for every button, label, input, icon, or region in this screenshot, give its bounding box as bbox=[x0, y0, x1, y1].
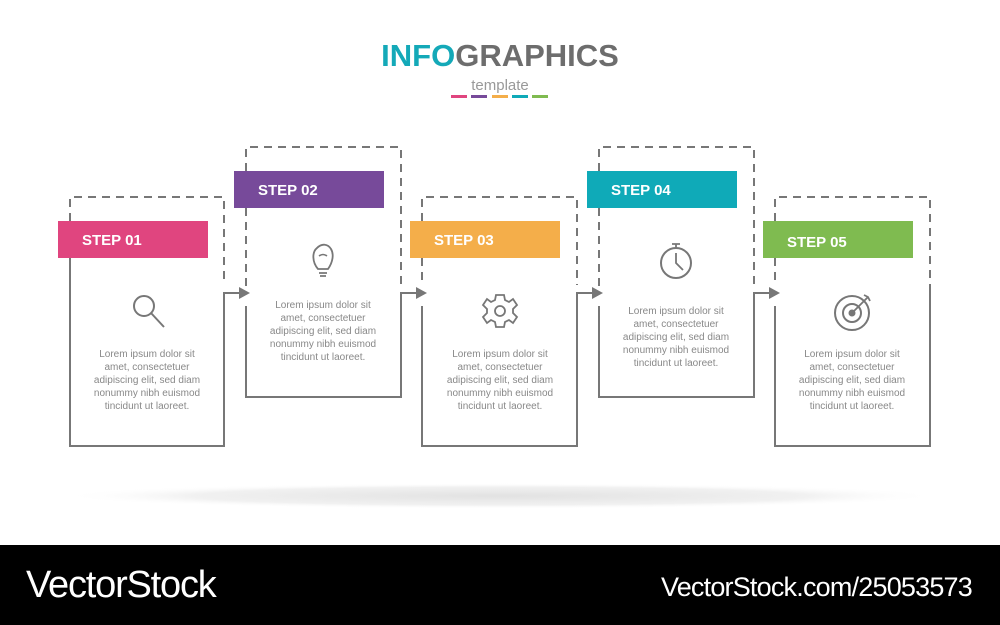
panel: step 04: adipiscing elit, sed diam bbox=[623, 332, 729, 343]
panel: step 04: nonummy nibh euismod bbox=[623, 345, 729, 356]
panel: step 03: tincidunt ut laoreet. bbox=[458, 401, 542, 412]
panel: step 03: adipiscing elit, sed diam bbox=[447, 375, 553, 386]
panel: step 05: tincidunt ut laoreet. bbox=[810, 401, 894, 412]
panel: step 01: STEP 01 bbox=[82, 232, 142, 249]
panel: step 04: tincidunt ut laoreet. bbox=[634, 358, 718, 369]
title: template bbox=[471, 77, 529, 94]
panel: step 01: adipiscing elit, sed diam bbox=[94, 375, 200, 386]
panel: step 01: amet, consectetuer bbox=[104, 362, 190, 373]
panel: step 04 bbox=[587, 147, 780, 397]
panel: step 05: STEP 05 bbox=[787, 234, 847, 251]
panel: step 02: Lorem ipsum dolor sit bbox=[275, 300, 371, 311]
shadow bbox=[60, 483, 940, 509]
footer bbox=[0, 545, 1000, 625]
panel: step 02: nonummy nibh euismod bbox=[270, 339, 376, 350]
panel: step 05 bbox=[763, 197, 930, 446]
footer: VectorStock.com/25053573 bbox=[661, 572, 972, 602]
panel: step 03: nonummy nibh euismod bbox=[447, 388, 553, 399]
panel: step 05: adipiscing elit, sed diam bbox=[799, 375, 905, 386]
panel: step 01 bbox=[58, 197, 250, 446]
panel: step 02: STEP 02 bbox=[258, 182, 318, 199]
panel: step 04: STEP 04 bbox=[611, 182, 671, 199]
panel: step 02: adipiscing elit, sed diam bbox=[270, 326, 376, 337]
panel: step 03: STEP 03 bbox=[434, 232, 494, 249]
panel: step 01: nonummy nibh euismod bbox=[94, 388, 200, 399]
panel: step 01: tincidunt ut laoreet. bbox=[105, 401, 189, 412]
panel: step 03: Lorem ipsum dolor sit bbox=[452, 349, 548, 360]
panel: step 04: Lorem ipsum dolor sit bbox=[628, 306, 724, 317]
title: INFOGRAPHICS bbox=[381, 38, 619, 73]
panel: step 04: amet, consectetuer bbox=[633, 319, 719, 330]
footer: VectorStock bbox=[26, 564, 218, 606]
title bbox=[381, 38, 619, 98]
panel: step 05: Lorem ipsum dolor sit bbox=[804, 349, 900, 360]
panel: step 02: tincidunt ut laoreet. bbox=[281, 352, 365, 363]
panel: step 03: amet, consectetuer bbox=[457, 362, 543, 373]
panel: step 05: nonummy nibh euismod bbox=[799, 388, 905, 399]
panel: step 01: Lorem ipsum dolor sit bbox=[99, 349, 195, 360]
panel: step 03 bbox=[410, 197, 603, 446]
panel: step 02 bbox=[234, 147, 427, 397]
panel: step 02: amet, consectetuer bbox=[280, 313, 366, 324]
panel: step 05: amet, consectetuer bbox=[809, 362, 895, 373]
